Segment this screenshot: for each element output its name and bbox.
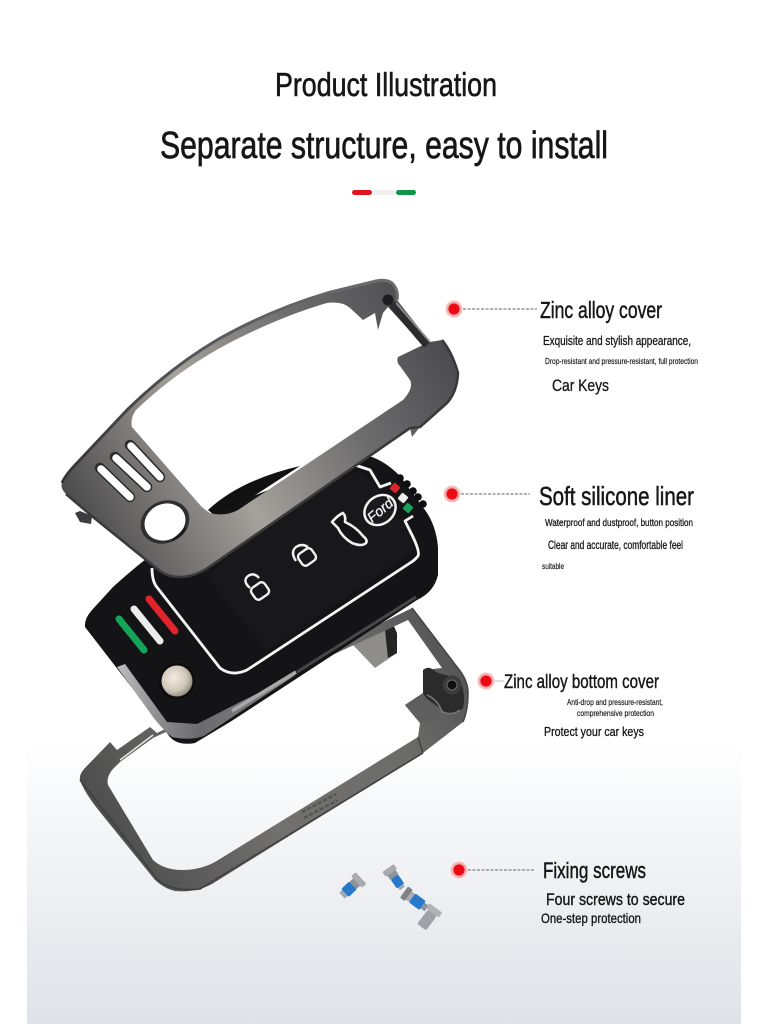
label: fixing screws: [450, 858, 685, 926]
marker: [478, 672, 504, 690]
top frame body: [62, 280, 458, 577]
white liner outline: [152, 465, 418, 673]
screw 2: [382, 864, 408, 892]
screw 4: [415, 903, 442, 932]
small tricolor dots: [389, 482, 414, 514]
background panel: [27, 740, 741, 1024]
description: comprehensive protection: [577, 709, 654, 718]
sliver of key behind frame: [208, 466, 300, 515]
subtitle: Separate structure, easy to install: [160, 125, 608, 167]
description: [542, 517, 693, 571]
tricolor divider: [352, 190, 416, 195]
description: Drop-resistant and pressure-resistant, full protection: [545, 356, 698, 366]
heading: Zinc alloy cover: [540, 297, 662, 323]
logo badge: Ford: [364, 494, 397, 525]
label: zinc alloy bottom cover: [478, 672, 663, 739]
fixing screws illustration: [337, 864, 442, 932]
marker: [450, 862, 535, 878]
liner bumps: [396, 474, 427, 508]
heading: Fixing screws: [543, 858, 646, 883]
frame highlights: [120, 735, 153, 760]
description: [544, 698, 663, 739]
heading: Soft silicone liner: [539, 481, 694, 511]
zinc alloy top cover: [62, 280, 458, 577]
logo badge: [357, 487, 403, 533]
description: [541, 890, 685, 926]
description: One-step protection: [541, 910, 641, 926]
description: Protect your car keys: [544, 724, 644, 739]
engraved mark: [302, 794, 338, 818]
rivet button: [159, 663, 195, 699]
label: soft silicone liner: [444, 481, 694, 571]
prong: [392, 304, 427, 345]
heading: Zinc alloy bottom cover: [504, 672, 660, 693]
marker: [446, 300, 537, 318]
side tab: [75, 511, 92, 524]
bottom zinc alloy cover: [80, 608, 468, 891]
marker: [444, 486, 530, 502]
description: [543, 333, 698, 395]
icon: lock: [293, 545, 318, 567]
label: zinc alloy cover: [446, 297, 698, 395]
metal rim: [117, 664, 297, 739]
screw boss: [405, 668, 464, 723]
side seam: [232, 672, 296, 711]
icon: trunk: [332, 513, 367, 545]
description: Exquisite and stylish appearance,: [543, 333, 691, 348]
description: Waterproof and dustproof, button position: [545, 517, 693, 529]
icon: unlock: [245, 574, 271, 601]
description: Car Keys: [552, 376, 609, 395]
description: suitable: [542, 562, 564, 571]
description: Anti-drop and pressure-resistant,: [567, 698, 663, 707]
top rim bevel: [62, 280, 397, 483]
description: Clear and accurate, comfortable feel: [548, 538, 683, 552]
vent slots: [100, 445, 160, 497]
italian stripes: [119, 599, 175, 650]
screw 3: [400, 886, 431, 914]
screw 1: [337, 872, 366, 902]
round opening: [133, 492, 197, 552]
bottom frame body: [80, 608, 468, 891]
title: Product Illustration: [275, 66, 497, 103]
button pad: [207, 470, 413, 648]
description: Four screws to secure: [546, 890, 685, 909]
hinge tab: [353, 622, 397, 668]
key underside: [85, 456, 438, 744]
key fob with soft silicone liner: [85, 456, 438, 744]
